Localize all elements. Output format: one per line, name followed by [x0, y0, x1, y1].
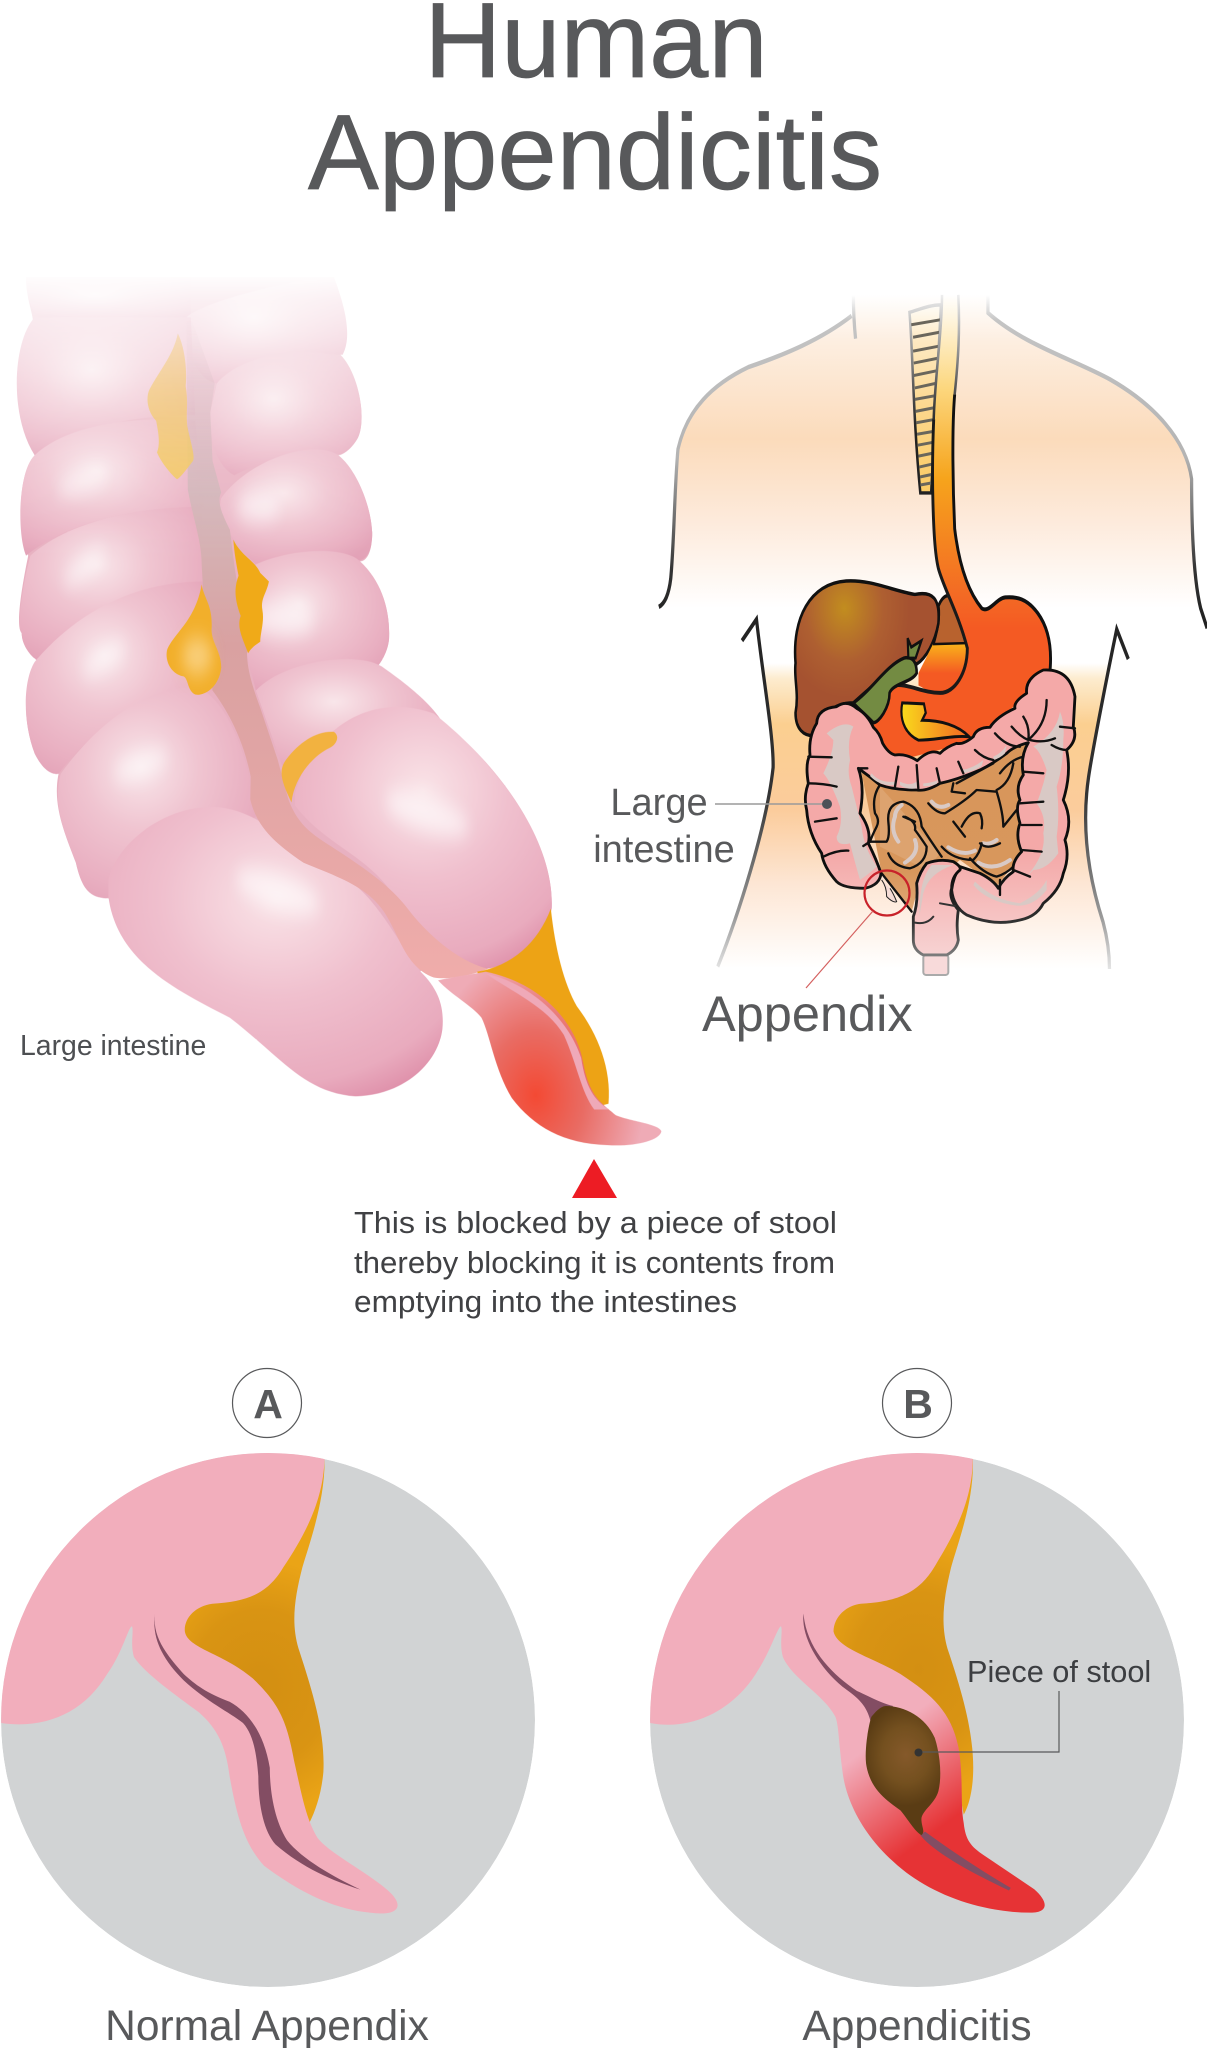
title: Appendicitis [308, 93, 882, 212]
label: large intestine: Large intestine [20, 1030, 206, 1062]
inner lumen band [186, 317, 488, 978]
icon: red triangle pointer [572, 1159, 617, 1198]
badge B [882, 1368, 952, 1438]
callout: piece of stool [914, 1654, 1151, 1756]
rectum [913, 860, 960, 975]
text block: blockage explanation: thereby blocking it is contents from [354, 1245, 835, 1280]
large intestine illustration [17, 277, 661, 1145]
lumen [803, 1614, 1011, 1890]
trachea [909, 305, 941, 493]
badge B: B [903, 1381, 933, 1427]
mesentery [834, 1459, 974, 1814]
badge A: A [253, 1381, 283, 1427]
appendix tiny [882, 880, 897, 902]
colon wall and appendix [1, 1453, 398, 1914]
mesentery [184, 1460, 325, 1822]
body diagram [659, 295, 1207, 975]
fecal deposits [147, 333, 337, 802]
badge A [232, 1368, 302, 1438]
lumen [154, 1614, 361, 1890]
inflamed appendix [438, 909, 661, 1145]
small intestine [862, 740, 1028, 912]
text block: blockage explanation [354, 1205, 837, 1319]
callout: large intestine label: intestine [593, 829, 735, 871]
text block: blockage explanation: emptying into the intestines [354, 1284, 737, 1319]
colon lobes [17, 277, 552, 1096]
panel: normal appendix [1, 1453, 535, 1987]
liver [795, 581, 967, 736]
callout: appendix label with red ring [702, 870, 913, 1042]
callout: appendix label with red ring: Appendix [702, 985, 913, 1042]
callout: large intestine label: Large [610, 782, 708, 824]
text block: blockage explanation: This is blocked by a piece of stool [354, 1205, 837, 1240]
pancreas [901, 703, 969, 740]
esophagus and stomach [871, 295, 1051, 760]
inflamed colon wall and appendix [650, 1453, 1045, 1913]
gallbladder [853, 638, 921, 723]
torso [659, 295, 1207, 969]
callout: large intestine label [593, 782, 832, 871]
panel: appendicitis [650, 1453, 1184, 1987]
title [308, 0, 882, 212]
callout: piece of stool: Piece of stool [967, 1654, 1151, 1689]
large intestine organ [805, 670, 1075, 922]
piece of stool [866, 1706, 940, 1835]
